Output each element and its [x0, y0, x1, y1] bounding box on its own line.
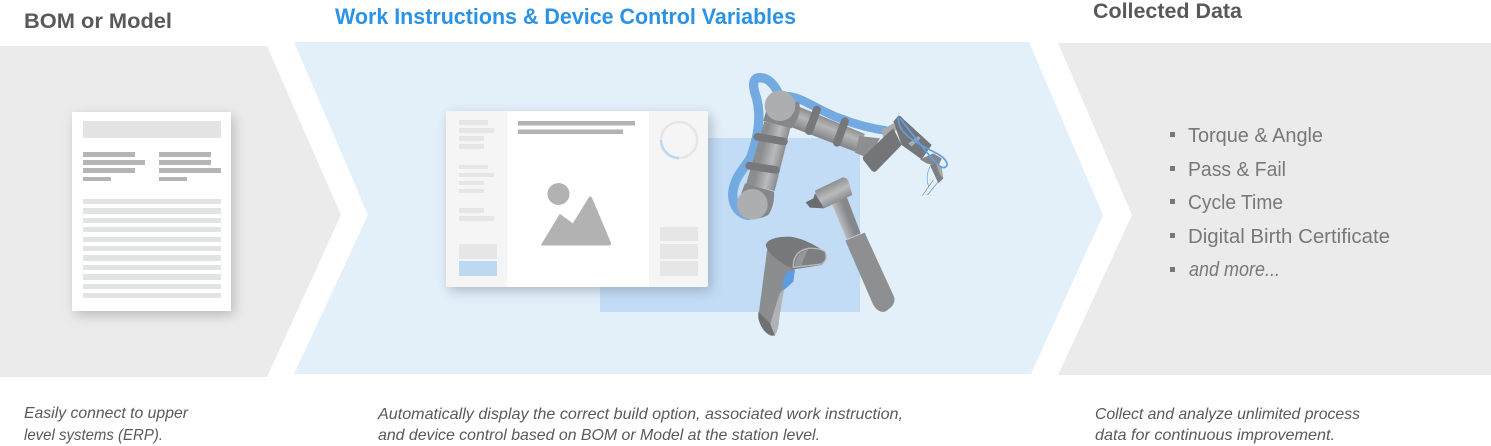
list item: Torque & Angle: Torque & Angle: [1188, 125, 1323, 147]
list item: Pass & Fail: Pass & Fail: [1188, 159, 1286, 181]
icon: software screen: [446, 111, 711, 291]
list item: Cycle Time: Cycle Time: [1188, 192, 1283, 214]
heading: BOM or Model: BOM or Model: [24, 9, 172, 33]
icon: torque tool: [806, 177, 894, 312]
caption: collected data: Collect and analyze unlimited process: [1095, 406, 1360, 423]
caption: collected data: data for continuous improvement.: [1095, 427, 1335, 444]
robot upper arm: [783, 96, 887, 152]
background square: light blue: [600, 138, 860, 312]
icon: robot arm: [733, 78, 947, 220]
caption: BOM: Easily connect to upper: [24, 405, 189, 422]
panel: work instructions chevron: [294, 42, 1103, 374]
icon: barcode scanner: [758, 237, 826, 336]
list: collected data items: [1170, 125, 1390, 281]
heading: Work Instructions: Work Instructions & Device Control Variables: [335, 4, 796, 29]
list item: and more: and more...: [1189, 259, 1280, 281]
caption: BOM: level systems (ERP).: [24, 427, 163, 444]
panel: collected data chevron: [1058, 43, 1491, 375]
caption: work instructions: and device control based on BOM or Model at the station level.: [378, 427, 820, 444]
caption: work instructions: Automatically display the correct build option, associated work instruction,: [377, 406, 903, 423]
icon: BOM document: [72, 112, 234, 315]
panel: BOM chevron: [0, 46, 341, 377]
robot wrist and gripper: [855, 116, 947, 196]
list item: Digital Birth Certificate: Digital Birth Certificate: [1188, 226, 1390, 248]
robot lower arm and joints: [733, 78, 800, 220]
